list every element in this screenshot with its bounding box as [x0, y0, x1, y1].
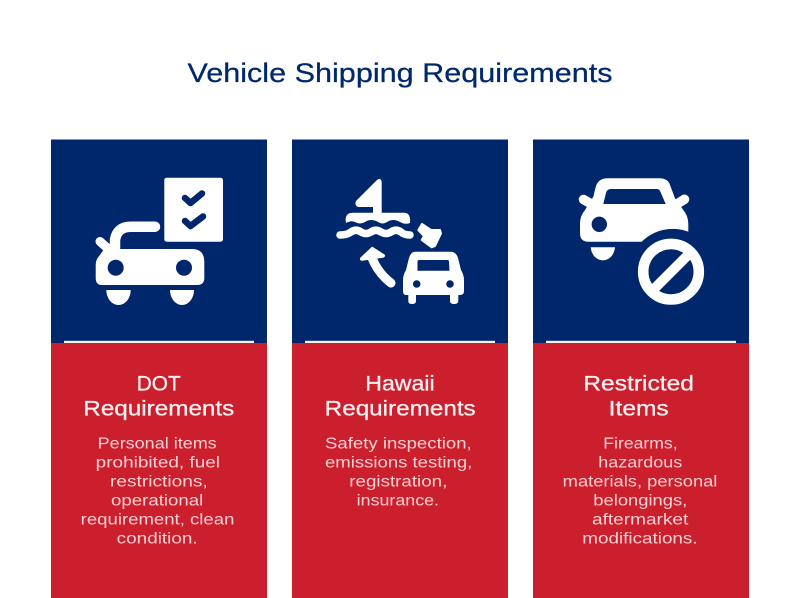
body text: aftermarket — [592, 511, 689, 528]
body text: Safety inspection, — [325, 435, 472, 452]
heading: Requirements — [83, 397, 234, 421]
body text — [325, 435, 472, 509]
panel: DOT requirements — [51, 140, 267, 598]
heading: Requirements — [325, 397, 476, 421]
body text: condition. — [117, 530, 198, 547]
icon: boat, waves, arrows and car — [340, 179, 464, 304]
body text: registration, — [349, 473, 447, 490]
body text — [81, 435, 234, 547]
icon: car with checklist — [96, 178, 223, 305]
heading: Items — [609, 397, 669, 421]
body text: emissions testing, — [325, 454, 472, 471]
body text: modifications. — [582, 530, 698, 547]
body text: materials, personal — [563, 473, 717, 490]
panel background: navy — [292, 140, 508, 343]
panel background: navy — [51, 140, 267, 343]
icon: car with prohibition sign — [580, 178, 699, 300]
heading — [325, 371, 476, 421]
panel background: red — [533, 343, 749, 598]
panel background: navy — [533, 140, 749, 343]
body text: Firearms, — [603, 435, 678, 452]
heading: Hawaii — [365, 371, 435, 395]
heading — [83, 371, 234, 421]
panel background: red — [292, 343, 508, 598]
body text: restrictions, — [110, 473, 208, 490]
panel background: red — [51, 343, 267, 598]
body text: Personal items — [98, 435, 217, 452]
title: Vehicle Shipping Requirements — [188, 58, 612, 88]
body text: requirement, clean — [81, 511, 234, 528]
body text: operational — [111, 492, 203, 509]
body text: prohibited, fuel — [96, 454, 220, 471]
divider line — [305, 341, 495, 343]
body text: hazardous — [598, 454, 683, 471]
divider line — [546, 341, 736, 343]
panel: Hawaii requirements — [292, 140, 508, 598]
heading: Restricted — [583, 371, 694, 395]
panel: restricted items — [533, 140, 749, 598]
heading — [583, 371, 694, 421]
body text: belongings, — [593, 492, 687, 509]
body text: insurance. — [357, 492, 439, 509]
body text — [563, 435, 717, 547]
heading: DOT — [137, 371, 181, 395]
divider line — [64, 341, 254, 343]
